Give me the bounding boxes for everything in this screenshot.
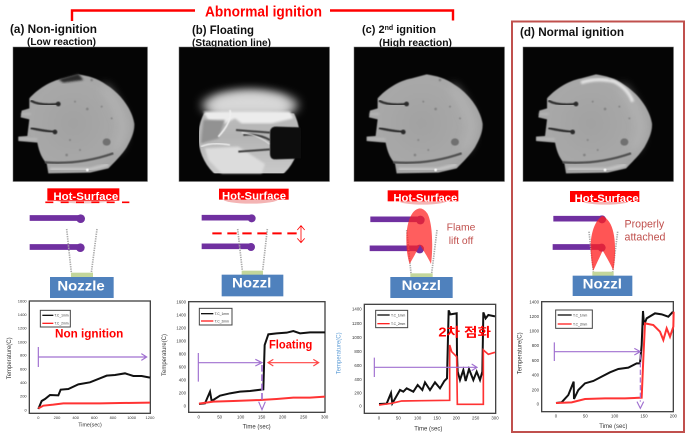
chart: a non-ignition: 800 <box>110 415 117 420</box>
chart: d normal ignition: 50 <box>583 414 588 419</box>
heading: c 2nd ignition <box>362 24 452 49</box>
title: abnormal ignition bracket: Abnormal ignition <box>205 4 322 20</box>
chart: c second ignition: 200 <box>453 415 461 420</box>
chart: c second ignition: 50 <box>396 415 401 420</box>
diagram: c flame lift off: lift off <box>449 236 473 247</box>
diagram: c flame lift off: Flame <box>447 223 476 234</box>
title: abnormal ignition bracket <box>72 4 453 21</box>
chart: a non-ignition: 1200 <box>18 326 27 331</box>
chart: d normal ignition: 600 <box>532 358 540 363</box>
chart: d normal ignition: 0 <box>537 402 540 407</box>
chart: b floating: 50 <box>217 414 223 419</box>
chart: c second ignition: T.C_2mm <box>391 322 405 326</box>
chart: c second ignition: Temperature(C) <box>336 332 342 374</box>
chart: d normal ignition: 800 <box>532 343 540 348</box>
chart: d normal ignition: 200 <box>532 387 540 392</box>
heading: b floating <box>192 25 271 49</box>
chart: b floating: 250 <box>300 414 308 419</box>
chart: c second ignition: 600 <box>354 363 362 368</box>
chart: a non-ignition: Non ignition <box>55 327 123 341</box>
chart: b floating: 200 <box>179 390 187 395</box>
heading: a non-ignition <box>10 24 97 48</box>
chart: d normal ignition: 400 <box>532 373 540 378</box>
chart: c second ignition: T.C_1mm <box>391 313 405 317</box>
chart: a non-ignition: 200 <box>20 394 27 399</box>
chart: b floating: T.C_1mm <box>215 312 229 316</box>
chart: d normal ignition: 1200 <box>529 314 540 319</box>
chart: b floating: 1000 <box>176 338 187 343</box>
chart: d normal ignition: 150 <box>640 414 648 419</box>
diagram: b floating: Nozzl <box>232 275 271 291</box>
chart: a non-ignition: T.C_2mm <box>54 322 69 326</box>
heading: c 2nd ignition: (c) 2 <box>362 24 385 36</box>
chart: c second ignition: 100 <box>414 415 422 420</box>
chart: b floating: 150 <box>258 414 266 419</box>
heading: b floating: (b) Floating <box>192 25 254 37</box>
diagram: d properly attached: attached <box>625 232 666 244</box>
photo: d normal ignition <box>523 47 674 182</box>
chart: c second ignition <box>336 304 499 432</box>
chart: b floating: 0 <box>184 403 187 408</box>
chart: b floating: 1600 <box>176 299 187 304</box>
chart: c second ignition: 300 <box>491 415 499 420</box>
chart: a non-ignition: Temperature(C) <box>7 337 13 379</box>
heading: c 2nd ignition: nd <box>385 25 393 32</box>
diagram: d properly attached: Hot-Surface <box>575 193 639 205</box>
frame: normal ignition panel <box>512 22 684 432</box>
heading: c 2nd ignition: (High reaction) <box>379 38 452 49</box>
chart: b floating: 100 <box>237 414 245 419</box>
diagram: d properly attached <box>553 191 666 296</box>
chart: b floating: 200 <box>279 414 287 419</box>
chart: a non-ignition: Time(sec) <box>78 423 102 429</box>
diagram: c flame lift off <box>370 190 476 298</box>
chart: a non-ignition: 400 <box>72 415 80 420</box>
chart: a non-ignition: 600 <box>20 366 27 371</box>
chart: a non-ignition: 1400 <box>18 312 27 317</box>
chart: b floating: T.C_2mm <box>215 319 229 323</box>
chart: b floating: 300 <box>321 414 329 419</box>
chart: c second ignition: 1000 <box>352 335 362 340</box>
chart: a non-ignition: 1000 <box>127 415 137 420</box>
chart: d normal ignition: 0 <box>555 414 558 419</box>
diagram: a non-ignition <box>30 188 129 298</box>
chart: d normal ignition: T.C_1mm <box>573 313 587 317</box>
chart: c second ignition: 400 <box>354 377 362 382</box>
chart: d normal ignition: Temperature(C) <box>518 332 524 374</box>
chart: b floating: Time (sec) <box>243 424 271 430</box>
diagram: c flame lift off: Nozzl <box>402 277 441 293</box>
chart: a non-ignition: 0 <box>37 415 40 420</box>
heading: d normal ignition: (d) Normal ignition <box>520 27 624 39</box>
chart: d normal ignition <box>518 299 678 430</box>
heading: a non-ignition: (a) Non-ignition <box>10 24 97 36</box>
chart: c second ignition: 0 <box>359 404 362 409</box>
chart: d normal ignition: T.C_2mm <box>573 322 587 326</box>
chart: b floating: 1400 <box>176 312 187 317</box>
chart: c second ignition: 150 <box>433 415 441 420</box>
photo: b floating <box>179 47 330 187</box>
chart: c second ignition: Time (sec) <box>414 426 442 432</box>
chart: a non-ignition: 800 <box>20 353 27 358</box>
diagram: d properly attached: Nozzl <box>583 276 622 292</box>
diagram: b floating: Hot-Surface <box>222 191 286 203</box>
photo: a non-ignition <box>13 47 148 182</box>
chart: d normal ignition: 200 <box>670 414 678 419</box>
chart: a non-ignition: 1200 <box>146 415 155 420</box>
heading: c 2nd ignition: ignition <box>393 24 436 36</box>
chart: c second ignition: 2차 점화 <box>438 325 491 339</box>
chart: a non-ignition: T.C_1mm <box>54 314 69 318</box>
chart: a non-ignition: 0 <box>24 407 27 412</box>
chart: c second ignition: 1400 <box>352 307 362 312</box>
diagram: a non-ignition: Nozzle <box>57 277 105 293</box>
chart: c second ignition: 250 <box>472 415 480 420</box>
chart: b floating: 400 <box>179 377 187 382</box>
chart: b floating: Floating <box>269 337 312 351</box>
chart: b floating <box>162 299 329 430</box>
chart: c second ignition: 800 <box>354 349 362 354</box>
chart: b floating: 600 <box>179 364 187 369</box>
diagram: c flame lift off: Hot-Surface <box>393 192 457 204</box>
chart: b floating: 1200 <box>176 325 187 330</box>
chart: c second ignition: 200 <box>354 390 362 395</box>
chart: d normal ignition: 1400 <box>529 299 540 304</box>
diagram: b floating <box>202 189 305 296</box>
photo: c second ignition <box>354 47 504 182</box>
chart: b floating: 800 <box>179 351 187 356</box>
diagram: a non-ignition: Hot-Surface <box>53 191 118 203</box>
chart: b floating: 0 <box>197 414 200 419</box>
chart: a non-ignition: 400 <box>20 380 27 385</box>
chart: c second ignition: 0 <box>378 415 381 420</box>
chart: d normal ignition: 100 <box>611 414 619 419</box>
chart: b floating: Temperature(C) <box>162 334 168 376</box>
heading: b floating: (Stagnation line) <box>192 38 271 49</box>
chart: c second ignition: 1200 <box>352 321 362 326</box>
chart: a non-ignition <box>7 298 155 429</box>
chart: a non-ignition: 200 <box>54 415 61 420</box>
chart: a non-ignition: 1600 <box>18 298 27 303</box>
chart: a non-ignition: 1000 <box>18 339 27 344</box>
heading: a non-ignition: (Low reaction) <box>27 37 96 48</box>
diagram: d properly attached: Properly <box>624 218 665 230</box>
chart: a non-ignition: 600 <box>91 415 98 420</box>
chart: d normal ignition: 1000 <box>529 329 540 334</box>
chart: d normal ignition: Time (sec) <box>599 424 627 430</box>
